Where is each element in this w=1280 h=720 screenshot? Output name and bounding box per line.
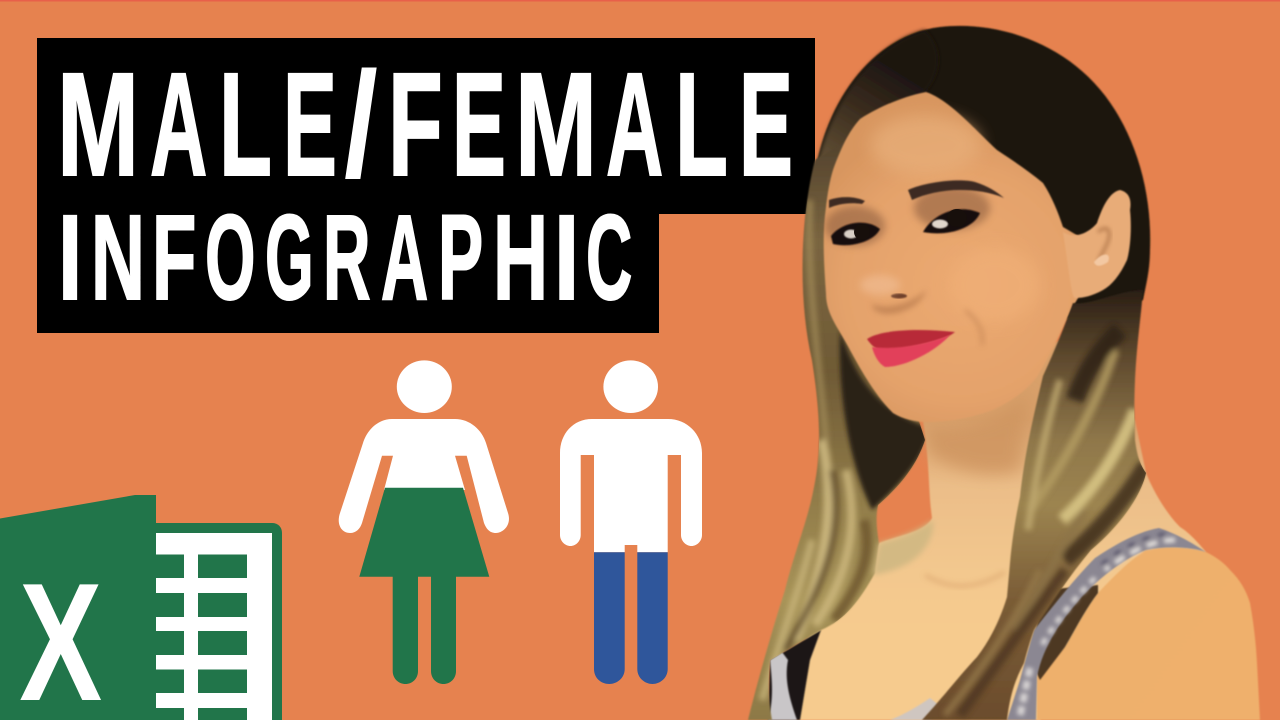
title line 2: G xyxy=(265,189,314,325)
title line 1: E xyxy=(739,43,793,207)
sheet white area xyxy=(156,533,272,720)
title line 1: A xyxy=(606,43,663,207)
smile line xyxy=(965,310,982,345)
title line 1: L xyxy=(219,43,272,207)
top dark hair xyxy=(812,26,1150,320)
front cover xyxy=(0,495,156,720)
dark hair beneath jaw xyxy=(840,330,930,510)
right eye white xyxy=(932,220,948,228)
right eye xyxy=(923,209,980,233)
icon: male figure xyxy=(560,360,702,684)
ear shape xyxy=(1063,190,1131,298)
neck shadow under chin xyxy=(925,390,1030,474)
title line 2: I xyxy=(554,189,579,325)
top accent line xyxy=(0,0,1280,2)
left eyebrow xyxy=(829,197,865,208)
eye socket shadow right xyxy=(914,186,990,230)
title line 2: I xyxy=(58,189,82,325)
title line 2: R xyxy=(323,189,370,325)
right hair streaks xyxy=(945,330,1146,715)
left hair streaks xyxy=(762,200,930,700)
forehead tone xyxy=(870,115,980,175)
title line 2: F xyxy=(152,189,196,325)
title line 1: E xyxy=(283,43,337,207)
female skirt and legs xyxy=(359,488,489,684)
title line 2: C xyxy=(586,189,632,325)
strap pattern xyxy=(1020,534,1175,716)
left eye xyxy=(831,223,880,245)
eye socket shadow left xyxy=(825,206,885,246)
portrait of presenter xyxy=(748,26,1260,720)
left eye shape xyxy=(831,223,880,245)
neckline strap xyxy=(890,698,945,720)
title line 1: E xyxy=(452,43,506,207)
right hair shape xyxy=(922,290,1146,720)
title line 2: A xyxy=(381,189,428,325)
lips xyxy=(867,330,955,367)
nose highlight xyxy=(860,275,900,295)
neck and chest xyxy=(790,340,1206,720)
dress left pattern xyxy=(768,652,797,720)
title line 1: L xyxy=(675,43,728,207)
title block xyxy=(37,38,815,333)
title background panel xyxy=(37,38,815,333)
male head xyxy=(603,360,658,413)
female head xyxy=(397,360,452,413)
back sheet xyxy=(156,523,282,720)
icon: Excel logo xyxy=(0,495,282,720)
icon: female figure xyxy=(339,360,509,684)
dress left black part xyxy=(768,630,821,720)
nose underside shadow xyxy=(872,290,926,314)
right eye shape xyxy=(923,209,980,233)
title line 2: P xyxy=(438,189,483,325)
left crown hair sheen xyxy=(810,30,938,215)
title line 1: M xyxy=(57,43,139,207)
title line 1: A xyxy=(150,43,207,207)
title line 1 xyxy=(57,43,793,207)
lower lip xyxy=(872,335,950,367)
cheek glow xyxy=(950,247,1040,323)
ear inner fold xyxy=(1098,228,1109,262)
face xyxy=(824,92,1085,422)
right hair strand xyxy=(922,290,1146,720)
left hair shape xyxy=(748,120,925,720)
dress under strap xyxy=(1030,585,1098,680)
sheet cells xyxy=(156,554,247,720)
pale hair lock on chest xyxy=(873,520,933,575)
arm and shoulder xyxy=(1037,547,1260,720)
left hair xyxy=(748,120,930,720)
upper lip xyxy=(867,330,955,352)
shoulder strap xyxy=(1007,528,1206,720)
title line 2: O xyxy=(205,189,256,325)
ear highlight xyxy=(1094,254,1109,266)
nostril xyxy=(891,294,907,298)
male torso and arms xyxy=(560,419,702,552)
left iris xyxy=(854,224,870,240)
title line 1: / xyxy=(345,43,377,207)
female torso and arms xyxy=(339,419,509,533)
left eye white xyxy=(844,230,858,238)
title line 2: H xyxy=(493,189,548,325)
right iris xyxy=(947,209,967,227)
clavicle shading xyxy=(925,572,1005,586)
ear xyxy=(1063,190,1131,298)
title line 1: F xyxy=(388,43,442,207)
title line 2: N xyxy=(91,189,145,325)
title line 2 xyxy=(58,189,632,325)
male legs xyxy=(594,552,668,684)
right eyebrow xyxy=(908,180,1004,200)
title line 1: M xyxy=(515,43,597,207)
